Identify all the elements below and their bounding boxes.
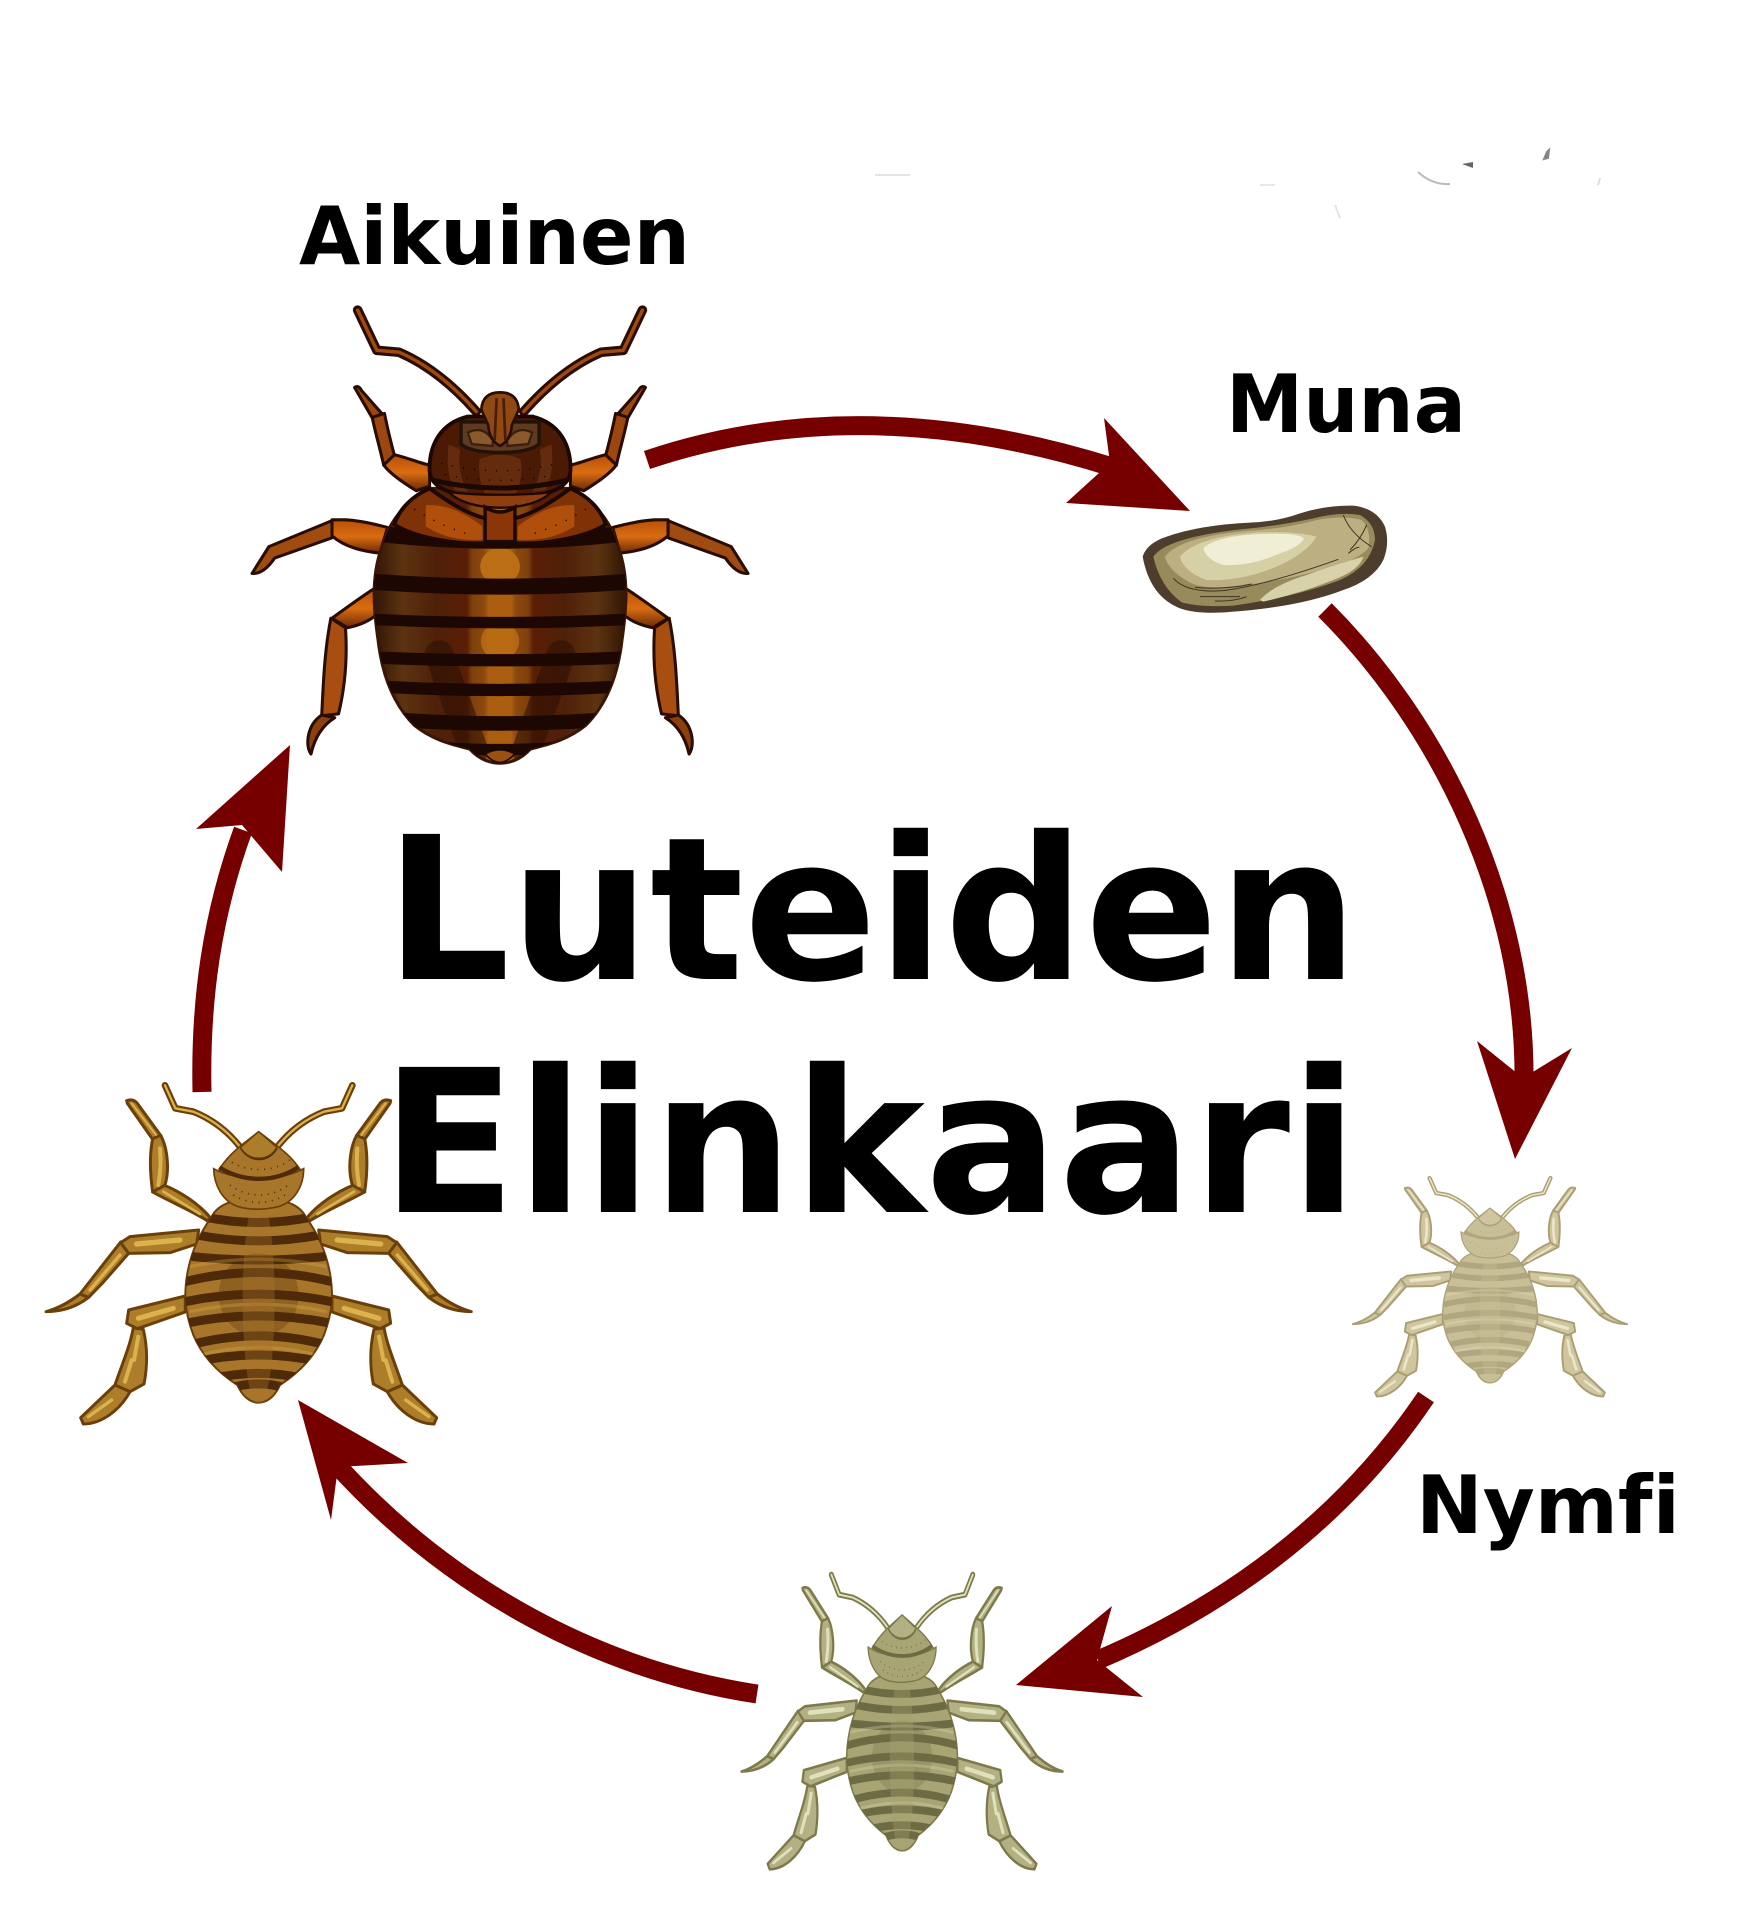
icon: adult bed bug: [252, 310, 748, 763]
icon: egg: [1143, 506, 1387, 613]
title line 2: Elinkaari: [381, 1027, 1358, 1259]
adult antennae: [358, 310, 642, 412]
label: Muna: Muna: [1226, 358, 1466, 451]
pale nymph body: [1442, 1248, 1537, 1385]
olive nymph body: [846, 1669, 957, 1854]
adult right wing pad: [514, 488, 606, 543]
adult abdomen: [374, 488, 626, 763]
label: Aikuinen: Aikuinen: [299, 190, 690, 283]
arrow: adult to egg: [647, 418, 1190, 511]
adult head and pronotum: [414, 392, 586, 542]
faint marks at top: [875, 150, 1600, 218]
olive nymph legs: [741, 1587, 1063, 1869]
arrow: egg to nymph: [1325, 610, 1572, 1159]
title line 1: Luteiden: [385, 794, 1358, 1026]
arrow: golden nymph to adult: [196, 745, 290, 1092]
pale nymph head: [1461, 1208, 1519, 1258]
icon: olive nymph: [741, 1575, 1063, 1869]
olive nymph head: [868, 1615, 936, 1682]
icon: pale nymph: [1353, 1178, 1627, 1397]
icon: golden nymph: [46, 1085, 471, 1424]
golden nymph head: [214, 1132, 304, 1209]
adult legs: [252, 387, 748, 754]
label: Nymfi: Nymfi: [1416, 1459, 1680, 1552]
golden nymph body: [185, 1193, 332, 1407]
adult left wing pad: [394, 488, 486, 543]
arrow: pale nymph to olive nymph: [1016, 1397, 1426, 1697]
pale nymph legs: [1353, 1188, 1627, 1397]
title: [381, 794, 1358, 1259]
golden nymph antennae: [165, 1085, 352, 1146]
pale nymph antennae: [1430, 1178, 1550, 1217]
arrow: olive nymph to golden nymph: [298, 1400, 757, 1694]
golden nymph legs: [46, 1100, 471, 1424]
olive nymph antennae: [831, 1575, 973, 1627]
